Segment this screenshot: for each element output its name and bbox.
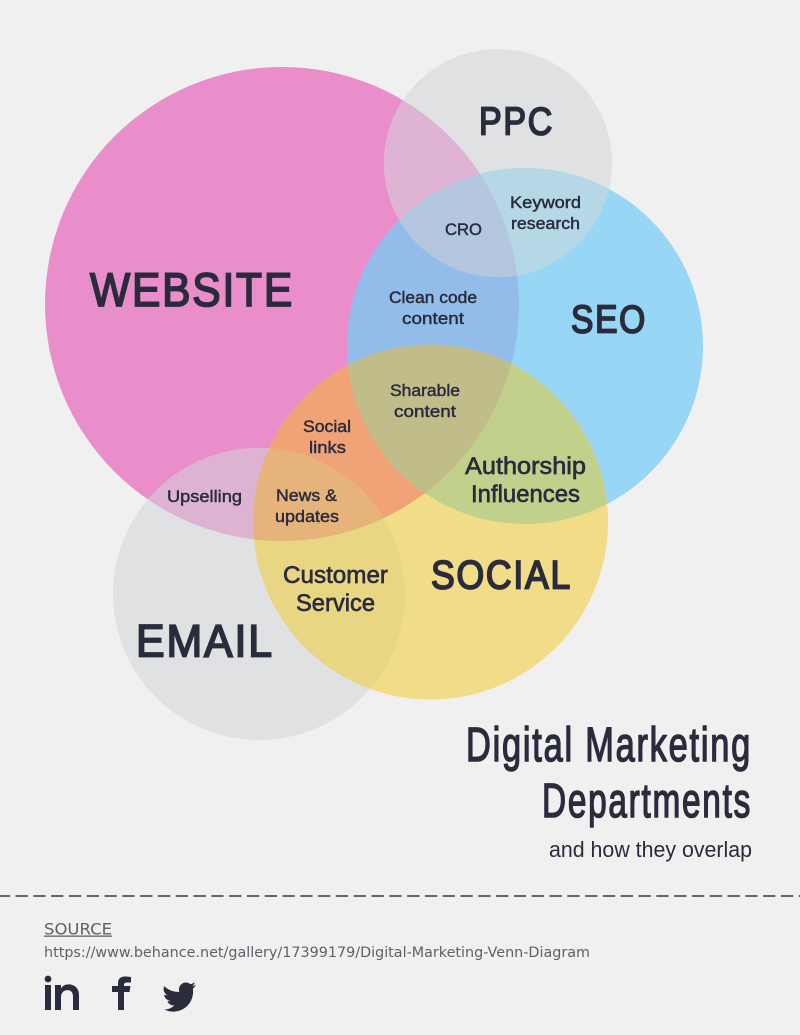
source URL: https://www.behance.net/gallery/17399179/Digital-Marketing-Venn-Diagram bbox=[44, 945, 590, 961]
venn diagram bbox=[45, 49, 703, 740]
label: Authorship Influences: Authorship bbox=[465, 453, 586, 480]
label: Authorship Influences bbox=[465, 453, 586, 508]
label: EMAIL: EMAIL bbox=[136, 616, 274, 666]
overlap: website and SEO bbox=[347, 174, 519, 364]
circle: PPC bbox=[384, 49, 612, 277]
label: News and updates bbox=[275, 486, 339, 526]
label: PPC: PPC bbox=[479, 100, 554, 144]
label: Sharable content: content bbox=[394, 402, 456, 421]
overlap: website and PPC bbox=[384, 100, 480, 220]
label: Sharable content bbox=[390, 381, 460, 421]
label: SOCIAL: SOCIAL bbox=[431, 554, 572, 598]
overlap: website, PPC and SEO bbox=[400, 174, 517, 277]
label: Customer Service bbox=[283, 562, 388, 617]
label: Customer Service: Service bbox=[296, 590, 375, 617]
label: Keyword research: Keyword bbox=[510, 193, 581, 212]
label: News and updates: News & bbox=[276, 486, 338, 505]
overlap: SEO and social bbox=[348, 344, 607, 524]
source heading: SOURCE bbox=[44, 920, 112, 938]
label: Social links bbox=[303, 417, 351, 457]
overlap: website, email and social bbox=[253, 448, 384, 541]
label: Social links: links bbox=[309, 438, 346, 457]
label: Authorship Influences: Influences bbox=[471, 481, 580, 508]
label: Clean code content: content bbox=[402, 309, 464, 328]
circle: email bbox=[113, 448, 405, 740]
overlap: website and social bbox=[253, 344, 511, 540]
label: Social links: Social bbox=[303, 417, 351, 436]
label: CRO: CRO bbox=[445, 220, 482, 239]
overlap: website, SEO and social bbox=[348, 344, 511, 493]
icon: facebook bbox=[112, 976, 131, 1010]
overlap: website and email bbox=[148, 448, 269, 540]
label: WEBSITE: WEBSITE bbox=[90, 264, 294, 317]
label: Customer Service: Customer bbox=[283, 562, 388, 589]
label: Keyword research bbox=[510, 193, 581, 233]
label: SEO: SEO bbox=[571, 298, 647, 342]
title bbox=[466, 718, 752, 828]
icon: linkedin bbox=[45, 976, 79, 1010]
circle: website bbox=[45, 67, 519, 541]
label: Clean code content bbox=[389, 288, 477, 328]
label: News and updates: updates bbox=[275, 507, 339, 526]
subtitle: and how they overlap bbox=[549, 837, 752, 862]
label: Keyword research: research bbox=[511, 214, 580, 233]
overlap: PPC and SEO bbox=[401, 168, 609, 277]
label: Sharable content: Sharable bbox=[390, 381, 460, 400]
circle: social bbox=[253, 344, 608, 700]
label: Clean code content: Clean code bbox=[389, 288, 477, 307]
icon: twitter bbox=[162, 981, 199, 1013]
circle: SEO bbox=[347, 168, 703, 524]
overlap: email and social bbox=[253, 448, 405, 689]
label: Upselling: Upselling bbox=[167, 487, 242, 506]
